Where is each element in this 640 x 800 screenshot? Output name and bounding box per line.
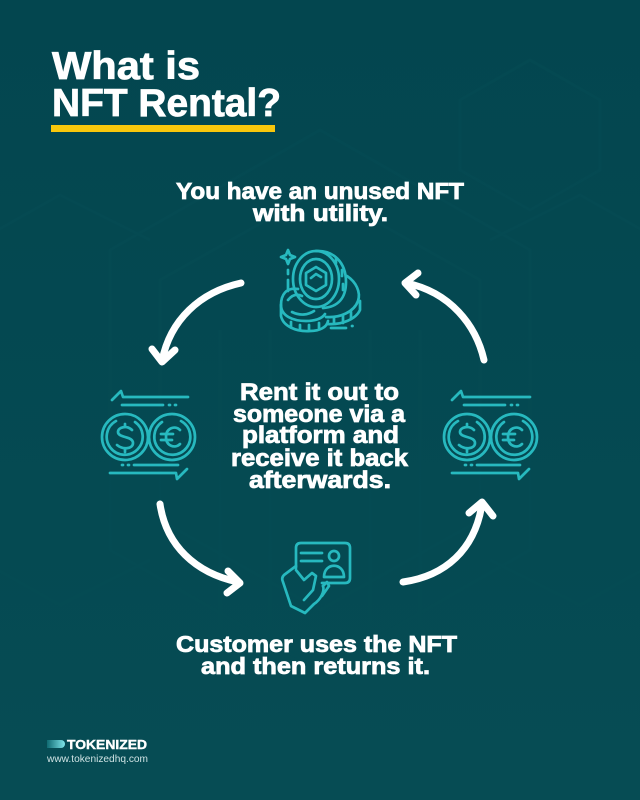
text: bottom step: and then returns it. [201,653,430,679]
text: centre [231,379,409,494]
text: centre: receive it back [231,445,409,472]
icon: NFT coins [281,250,360,331]
text: top step [176,178,464,226]
title: What is [52,45,200,88]
arrow: top right [405,273,484,360]
logo: Tokenized [46,737,148,765]
icon: hand holding ID card [282,543,350,613]
title [52,45,281,125]
text: centre: someone via a [233,401,406,428]
text: top step: You have an unused NFT [176,178,464,204]
text: top step: with utility. [252,200,388,226]
text: centre: Rent it out to [240,379,399,406]
logo: Tokenized: www.tokenizedhq.com [46,754,148,765]
text: bottom step: Customer uses the NFT [176,631,457,657]
arrow: bottom left [160,504,240,593]
title underline [51,125,275,132]
text: centre: afterwards. [249,467,391,494]
title: NFT Rental? [52,82,281,125]
text: centre: platform and [242,422,399,449]
arrow: bottom right [403,502,493,582]
logo: Tokenized: TOKENIZED [67,737,147,752]
arrow: top left [152,283,241,362]
icon: currency exchange left [102,391,195,479]
text: bottom step [176,631,457,679]
icon: currency exchange right [444,391,537,479]
